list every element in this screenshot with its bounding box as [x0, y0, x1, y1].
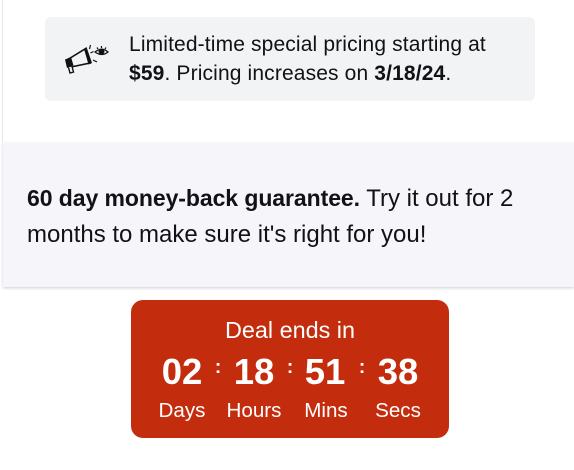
minutes label: Mins — [304, 399, 348, 422]
seconds value: 38 — [378, 351, 418, 392]
pricing text: $59. Pricing increases on 3/18/24. — [129, 62, 451, 85]
panel: guarantee — [3, 143, 574, 287]
seconds label: Secs — [375, 399, 421, 422]
panel: countdown — [131, 300, 449, 438]
pricing text: Limited-time special pricing starting at — [129, 33, 486, 56]
separator: : — [359, 357, 365, 378]
minutes value: 51 — [305, 351, 345, 392]
days label: Days — [159, 399, 205, 422]
countdown heading: Deal ends in — [225, 317, 355, 343]
guarantee text — [27, 185, 513, 248]
page left border — [2, 0, 3, 143]
days value: 02 — [162, 351, 202, 392]
guarantee text: months to make sure it's right for you! — [27, 221, 426, 248]
separator: : — [287, 357, 293, 378]
hours label: Hours — [227, 399, 281, 422]
pricing text — [129, 33, 486, 85]
panel: pricing notice — [45, 17, 535, 101]
icon: megaphone — [65, 44, 109, 74]
separator: : — [215, 357, 221, 378]
guarantee text: 60 day money-back guarantee. Try it out for 2 — [27, 185, 513, 212]
hours value: 18 — [234, 351, 274, 392]
